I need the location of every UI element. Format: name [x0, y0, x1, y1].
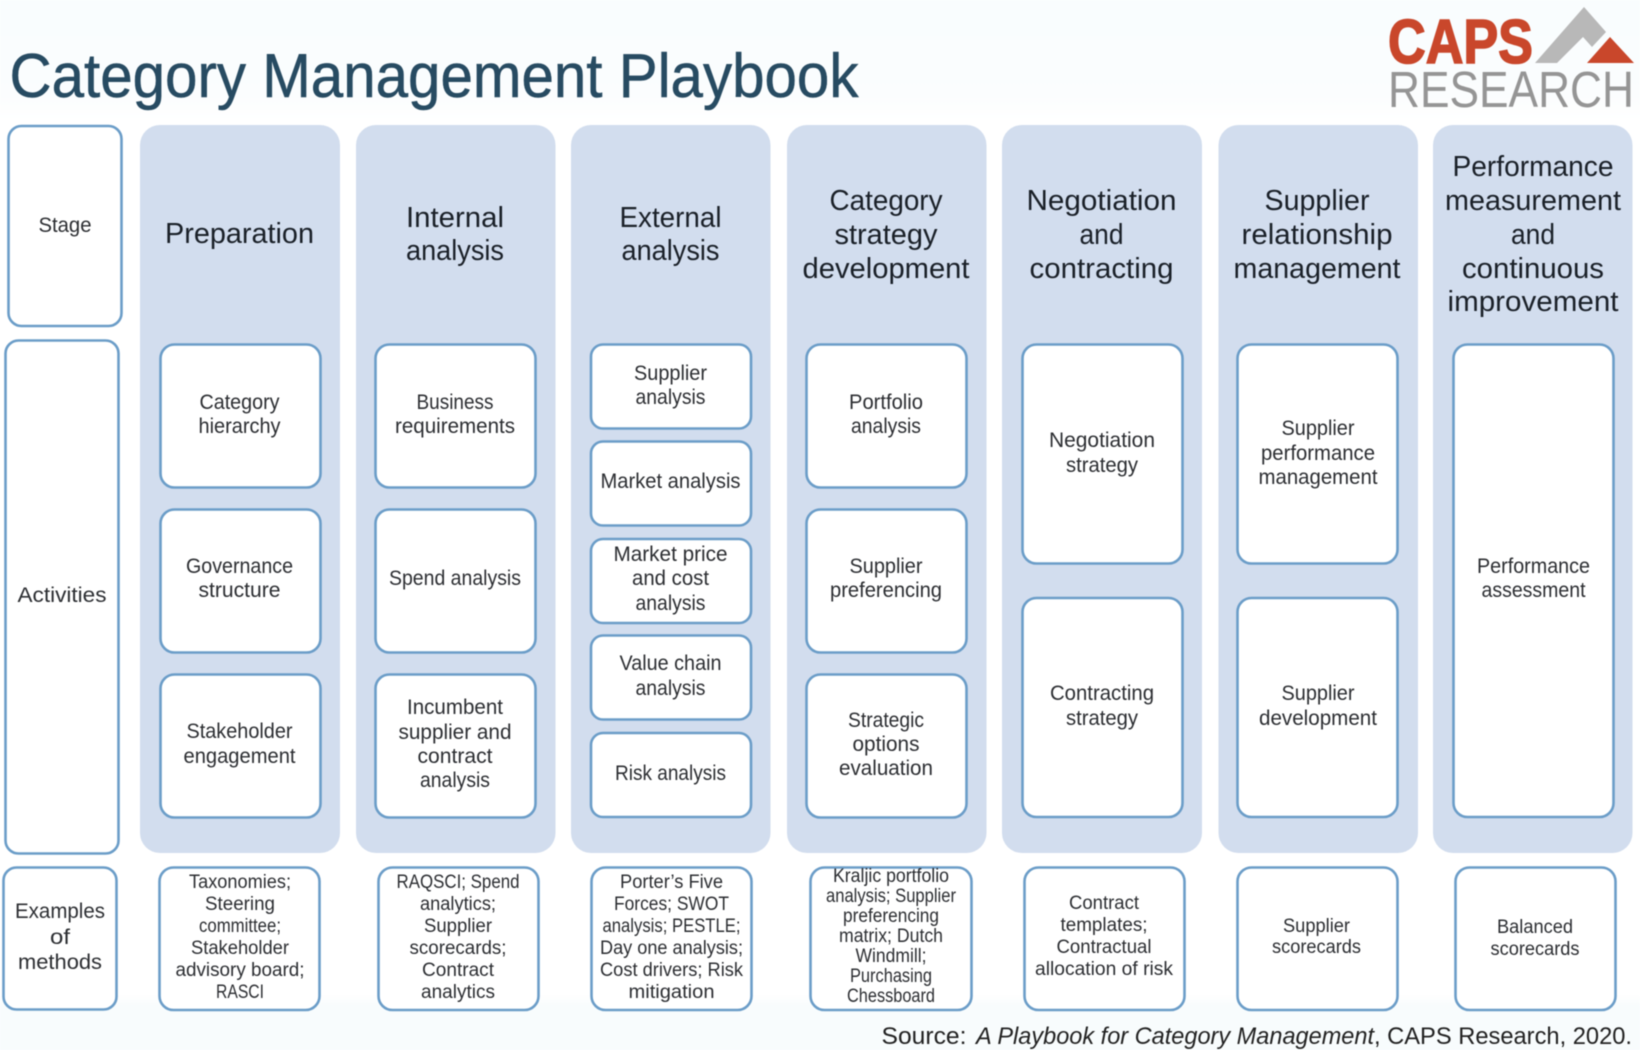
methods: External analysis: Forces; SWOT — [614, 894, 729, 915]
activity: Incumbent supplier and contract analysis: supplier and — [398, 721, 512, 744]
panel: External analysis — [571, 125, 770, 853]
activity: Portfolio analysis — [806, 344, 966, 488]
methods: Internal analysis: analytics; — [420, 894, 496, 915]
methods: Supplier relationship management: Supplier — [1283, 916, 1351, 937]
row label: Examples of methods: Examples — [15, 900, 105, 923]
activity: Spend analysis — [376, 510, 536, 652]
activity: Performance assessment — [1454, 344, 1614, 817]
activity: Supplier development: development — [1259, 707, 1377, 730]
methods: Category strategy development: Kraljic portfolio — [833, 866, 949, 887]
methods: External analysis: mitigation — [628, 982, 714, 1003]
activity: Supplier development — [1238, 598, 1398, 817]
activity: Supplier analysis: Supplier — [634, 362, 707, 385]
methods: Preparation — [160, 868, 320, 1010]
methods: Negotiation and contracting: Contractual — [1056, 937, 1152, 958]
activity: Governance structure: structure — [198, 579, 280, 602]
methods: Internal analysis: Contract — [422, 960, 495, 981]
row label: Examples of methods — [4, 868, 116, 1010]
methods: Category strategy development: matrix; Dutch — [839, 926, 943, 947]
heading: Category strategy development — [802, 185, 970, 285]
methods: Internal analysis: RAQSCI; Spend — [396, 872, 520, 893]
methods: Preparation: committee; — [199, 916, 281, 937]
activity: Incumbent supplier and contract analysis: analysis — [420, 769, 490, 792]
methods: Category strategy development: Purchasing — [850, 966, 932, 987]
activity: Business requirements: Business — [416, 391, 494, 414]
activity: Portfolio analysis: analysis — [851, 415, 921, 438]
activity: Performance assessment: assessment — [1482, 579, 1586, 602]
activity: Strategic options evaluation: Strategic — [848, 709, 924, 732]
activity: Value chain analysis: analysis — [636, 677, 706, 700]
methods: Preparation: Steering — [205, 894, 275, 915]
activity: Business requirements — [376, 344, 536, 488]
heading: Internal analysis: analysis — [406, 235, 504, 267]
activity: Supplier analysis: analysis — [636, 386, 706, 409]
logo: CAPS Research — [1388, 7, 1634, 118]
activity: Stakeholder engagement: Stakeholder — [186, 720, 293, 743]
heading: Category strategy development: Category — [830, 185, 943, 217]
activity: Category hierarchy: hierarchy — [198, 415, 281, 438]
activity: Risk analysis: Risk analysis — [615, 762, 726, 785]
row label: Examples of methods: of — [50, 926, 70, 949]
activity: Supplier performance management — [1238, 344, 1398, 564]
methods: Internal analysis: scorecards; — [410, 938, 506, 959]
activity: Stakeholder engagement: engagement — [184, 745, 296, 768]
row label: Examples of methods: methods — [18, 951, 102, 974]
panel: Negotiation and contracting — [1002, 125, 1202, 853]
activity: Market price and cost analysis: analysis — [636, 592, 706, 615]
methods: External analysis: Porter’s Five — [620, 872, 723, 893]
methods: Negotiation and contracting: Contract — [1069, 893, 1140, 914]
activity: Incumbent supplier and contract analysis: Incumbent — [407, 696, 503, 719]
row label: Stage: Stage — [38, 214, 92, 237]
activity: Market analysis — [591, 442, 751, 526]
activity: Market price and cost analysis: Market price — [614, 543, 728, 566]
methods: Preparation: Stakeholder — [191, 938, 290, 959]
methods: Internal analysis — [378, 868, 538, 1010]
methods: Negotiation and contracting — [1024, 868, 1184, 1010]
methods: Category strategy development: Chessboard — [847, 986, 935, 1007]
activity: Business requirements: requirements — [395, 415, 515, 438]
activity: Incumbent supplier and contract analysis: contract — [418, 745, 493, 768]
source line: Source: — [882, 1023, 966, 1050]
activity: Negotiation strategy — [1022, 344, 1182, 564]
row label: Activities: Activities — [18, 584, 106, 607]
heading: External analysis: analysis — [622, 235, 720, 267]
activity: Strategic options evaluation — [806, 674, 966, 818]
panel: Preparation — [140, 125, 340, 853]
activity: Supplier preferencing: Supplier — [850, 555, 922, 578]
methods: Performance measurement: scorecards — [1490, 939, 1580, 960]
activity: Spend analysis: Spend analysis — [389, 567, 521, 590]
panel: Performance measurement and continuous improvement — [1433, 125, 1632, 853]
title: Category Management Playbook — [10, 42, 859, 111]
row label: Activities — [6, 340, 118, 854]
row label: Stage — [8, 126, 122, 326]
activity: Contracting strategy: strategy — [1066, 707, 1138, 730]
activity: Contracting strategy — [1022, 598, 1182, 817]
panel: Supplier relationship management — [1218, 125, 1418, 853]
methods: Performance measurement — [1456, 868, 1616, 1010]
methods: External analysis — [592, 868, 752, 1010]
heading: Supplier relationship management — [1234, 185, 1400, 285]
activity: Strategic options evaluation: evaluation — [839, 757, 933, 780]
activity: Stakeholder engagement — [160, 674, 320, 818]
activity: Value chain analysis: Value chain — [620, 652, 722, 675]
heading: Performance measurement and continuous improvement — [1445, 151, 1621, 318]
activity: Incumbent supplier and contract analysis — [376, 674, 536, 818]
heading: Performance measurement and continuous improvement: measurement — [1445, 185, 1621, 217]
activity: Supplier preferencing — [806, 510, 966, 652]
activity: Category hierarchy: Category — [200, 391, 280, 414]
heading: Category strategy development: development — [802, 253, 970, 285]
activity: Portfolio analysis: Portfolio — [849, 391, 923, 414]
source line: , CAPS Research, 2020. — [1374, 1023, 1632, 1050]
methods: Supplier relationship management — [1238, 868, 1398, 1010]
methods: Negotiation and contracting: templates; — [1060, 915, 1148, 936]
activity: Governance structure: Governance — [186, 555, 293, 578]
source line — [882, 1023, 1632, 1050]
methods: Category strategy development: analysis; Supplier — [826, 886, 957, 907]
panel: Internal analysis — [356, 125, 556, 853]
methods: External analysis: analysis; PESTLE; — [602, 916, 740, 937]
activity: Supplier preferencing: preferencing — [830, 579, 942, 602]
activity: Supplier performance management: Supplier — [1282, 417, 1354, 440]
activity: Negotiation strategy: Negotiation — [1049, 429, 1155, 452]
activity: Market analysis: Market analysis — [600, 470, 740, 493]
activity: Market price and cost analysis — [591, 539, 751, 623]
methods: Internal analysis: Supplier — [424, 916, 493, 937]
logo: CAPS Research: CAPS — [1388, 8, 1533, 77]
heading: Supplier relationship management: Supplier — [1264, 185, 1370, 217]
heading: Performance measurement and continuous improvement: continuous — [1462, 253, 1604, 285]
methods: Category strategy development: Windmill; — [856, 946, 926, 967]
heading: Supplier relationship management: management — [1234, 253, 1400, 285]
heading: External analysis — [620, 202, 722, 267]
heading: Negotiation and contracting — [1026, 185, 1176, 285]
heading: Negotiation and contracting: and — [1080, 219, 1124, 251]
heading: External analysis: External — [620, 202, 722, 234]
activity: Value chain analysis — [591, 636, 751, 720]
heading: Performance measurement and continuous improvement: and — [1511, 219, 1555, 251]
activity: Risk analysis — [591, 733, 751, 817]
methods: Negotiation and contracting: allocation of risk — [1035, 959, 1174, 980]
activity: Supplier development: Supplier — [1282, 682, 1354, 705]
methods: Supplier relationship management: scorecards — [1272, 937, 1361, 958]
heading: Preparation: Preparation — [165, 218, 314, 250]
methods: Preparation: advisory board; — [176, 960, 304, 981]
activity: Performance assessment: Performance — [1477, 555, 1590, 578]
activity: Strategic options evaluation: options — [852, 733, 920, 756]
heading: Performance measurement and continuous improvement: Performance — [1452, 151, 1614, 183]
heading: Negotiation and contracting: Negotiation — [1026, 185, 1176, 217]
methods: External analysis: Cost drivers; Risk — [600, 960, 743, 981]
activity: Supplier analysis — [591, 344, 751, 428]
heading: Negotiation and contracting: contracting — [1030, 253, 1174, 285]
activity: Contracting strategy: Contracting — [1050, 682, 1154, 705]
activity: Negotiation strategy: strategy — [1066, 454, 1138, 477]
methods: Category strategy development — [810, 866, 972, 1010]
heading: Supplier relationship management: relationship — [1242, 219, 1392, 251]
heading: Performance measurement and continuous improvement: improvement — [1448, 286, 1618, 318]
methods: Internal analysis: analytics — [421, 982, 495, 1003]
activity: Supplier performance management: management — [1258, 466, 1378, 489]
activity: Market price and cost analysis: and cost — [632, 567, 709, 590]
panel: Category strategy development — [787, 125, 986, 853]
methods: Performance measurement: Balanced — [1497, 917, 1573, 938]
methods: External analysis: Day one analysis; — [600, 938, 743, 959]
methods: Preparation: RASCI — [216, 982, 264, 1003]
activity: Category hierarchy — [160, 344, 320, 488]
activity: Supplier performance management: performance — [1261, 442, 1375, 465]
heading: Internal analysis — [406, 202, 504, 267]
methods: Category strategy development: preferencing — [843, 906, 939, 927]
heading: Category strategy development: strategy — [834, 219, 938, 251]
methods: Preparation: Taxonomies; — [189, 872, 291, 893]
source line: A Playbook for Category Management — [974, 1023, 1375, 1050]
activity: Governance structure — [160, 510, 320, 652]
heading: Internal analysis: Internal — [406, 202, 504, 234]
